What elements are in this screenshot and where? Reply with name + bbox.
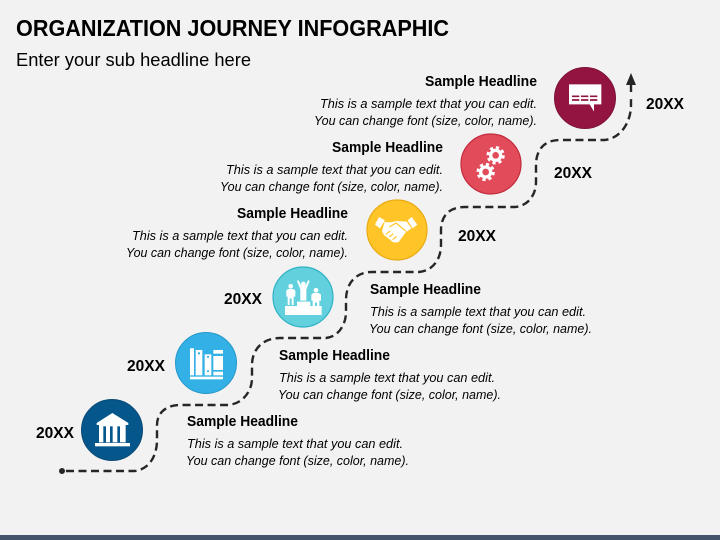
text block step 3: This is a sample text that you can edit. [370,305,586,319]
text block step 5: This is a sample text that you can edit. [226,163,443,177]
text block step 6: Sample Headline [425,74,537,90]
dashed journey path with arrow [59,73,636,474]
step 2 icon: books [176,332,236,394]
subtitle: Enter your sub headline here [16,50,251,70]
text block step 5 [220,140,443,194]
year labels: 20XX [36,425,74,442]
text block step 5: Sample Headline [332,140,443,156]
step 1 icon: bank [82,400,142,460]
text block step 3 [369,282,592,336]
year labels: 20XX [554,165,592,182]
year labels: 20XX [127,358,165,375]
text block step 3: You can change font (size, color, name). [369,322,592,336]
text block step 1 [186,414,409,468]
title: ORGANIZATION JOURNEY INFOGRAPHIC [16,15,449,41]
text block step 2: This is a sample text that you can edit. [279,371,495,385]
text block step 1: This is a sample text that you can edit. [187,437,403,451]
text block step 2: Sample Headline [279,348,390,364]
text block step 2: You can change font (size, color, name). [278,388,501,402]
text block step 2 [278,348,501,402]
text block step 4: You can change font (size, color, name). [126,246,348,260]
text block step 4: This is a sample text that you can edit. [132,229,348,243]
year labels: 20XX [458,228,496,245]
text block step 1: You can change font (size, color, name). [186,454,409,468]
text block step 4: Sample Headline [237,206,348,222]
text block step 3: Sample Headline [370,282,481,298]
year labels: 20XX [646,96,684,113]
step 6 icon: chat message [554,68,616,128]
step 4 icon: handshake [367,200,427,260]
step 5 icon: gears [461,134,521,194]
year labels [36,96,684,442]
year labels: 20XX [224,291,262,308]
text block step 5: You can change font (size, color, name). [220,180,443,194]
text block step 6: You can change font (size, color, name). [314,114,537,128]
text block step 6: This is a sample text that you can edit. [320,97,537,111]
step 3 icon: podium with people [273,267,333,327]
text block step 6 [314,74,537,128]
footer bar [0,535,720,540]
text block step 4 [126,206,348,260]
text block step 1: Sample Headline [187,414,298,430]
